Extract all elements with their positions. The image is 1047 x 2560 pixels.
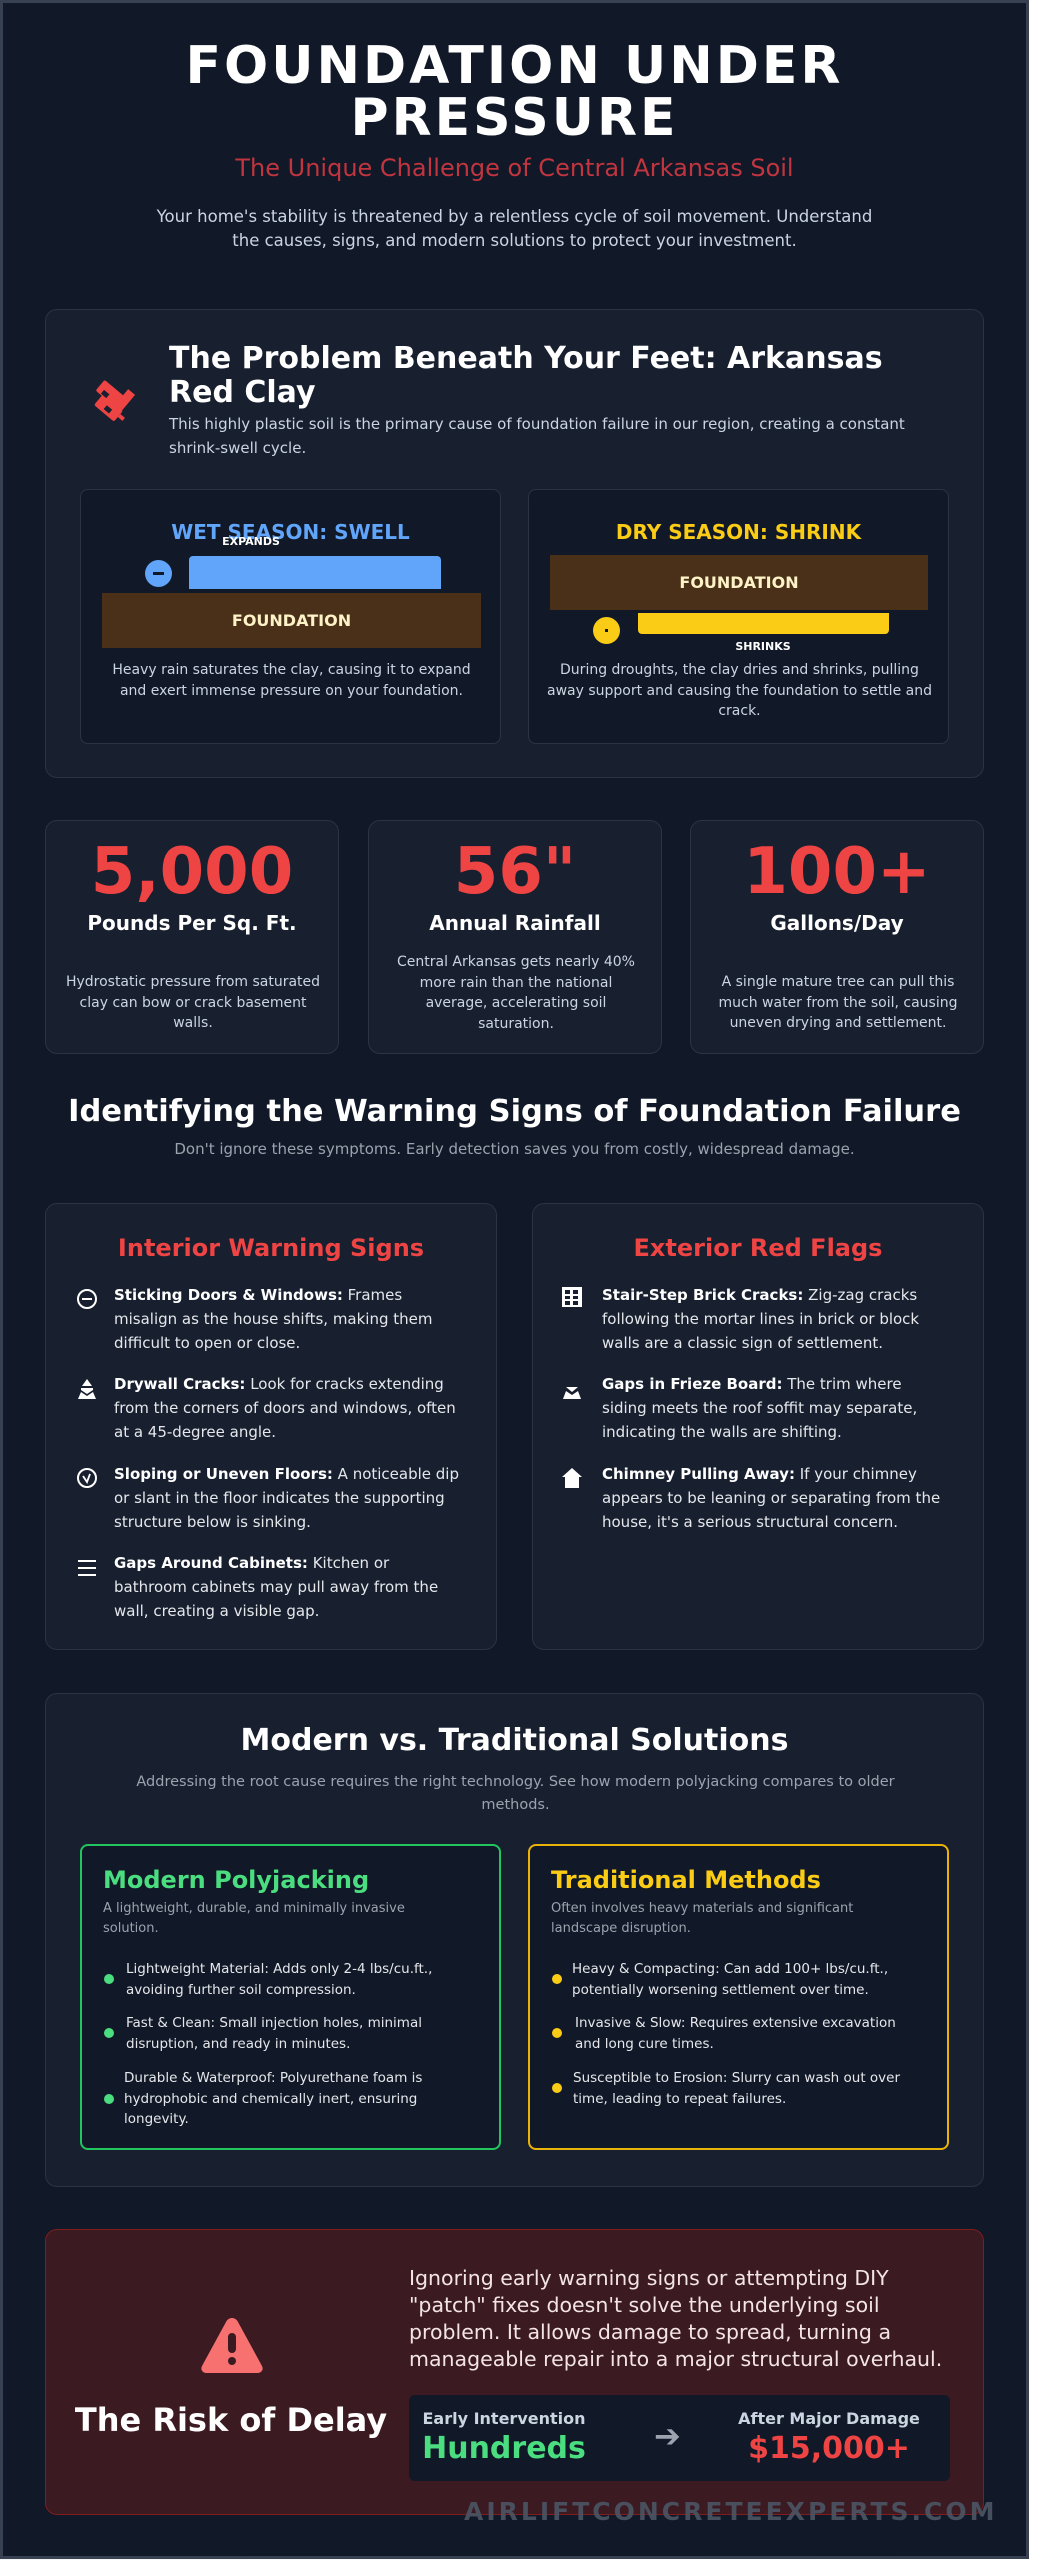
stat card: 5,000: 5,000 — [91, 835, 293, 909]
item: sloping floors: Sloping or Uneven Floors: A noticeable dip — [114, 1465, 459, 1483]
list: traditional drawbacks: and long cure times. — [575, 2036, 714, 2052]
item: chimney: house, it's a serious structural concern. — [602, 1513, 898, 1531]
panel: modern polyjacking: Modern Polyjacking — [103, 1866, 369, 1894]
panel: interior warning signs: Interior Warning Signs — [118, 1234, 424, 1262]
panel: dry season: DRY SEASON: SHRINK — [616, 520, 861, 544]
list: traditional drawbacks: Susceptible to Erosion: Slurry can wash out over — [573, 2070, 900, 2086]
item: chimney — [602, 1465, 940, 1531]
foundation block — [550, 555, 928, 610]
label: shrinks: SHRINKS — [735, 640, 791, 653]
stat card: 100+: 100+ — [743, 835, 931, 909]
title: FOUNDATION UNDER — [186, 36, 843, 96]
paragraph: manageable repair into a major structural overhaul. — [409, 2347, 942, 2371]
description — [168, 415, 905, 457]
intro text: Your home's stability is threatened by a relentless cycle of soil movement. Understand — [157, 207, 872, 226]
bar: shrinking clay — [638, 613, 889, 634]
foundation block: FOUNDATION — [232, 611, 351, 630]
item: frieze board: indicating the walls are shifting. — [602, 1423, 842, 1441]
item: sloping floors — [114, 1465, 459, 1531]
item: sloping floors: structure below is sinking. — [114, 1513, 311, 1531]
item: chimney: Chimney Pulling Away: If your chimney — [602, 1465, 917, 1483]
panel: dry season: away support and causing the foundation to settle and — [547, 682, 932, 698]
item: drywall cracks — [114, 1375, 456, 1441]
icon: warning triangle — [201, 2318, 263, 2373]
item: frieze board — [602, 1375, 917, 1441]
title: PRESSURE — [350, 88, 679, 148]
panel: wet season — [80, 489, 501, 744]
item: gaps around cabinets: bathroom cabinets may pull away from the — [114, 1578, 438, 1596]
list: traditional drawbacks: Heavy & Compacting: Can add 100+ lbs/cu.ft., — [572, 1961, 888, 1977]
item: stair-step cracks: walls are a classic sign of settlement. — [602, 1334, 883, 1352]
list: modern benefits: avoiding further soil compression. — [126, 1982, 356, 1998]
description: shrink-swell cycle. — [169, 439, 306, 457]
stat card: 56": Central Arkansas gets nearly 40% more rain than the national average, accelerating soil saturation. — [397, 954, 635, 1032]
intro text — [156, 207, 872, 250]
item: sticking doors — [114, 1286, 433, 1352]
cost comparison — [409, 2395, 950, 2481]
title — [186, 36, 843, 148]
panel: traditional methods: Traditional Methods — [551, 1866, 821, 1894]
icon: lines — [78, 1560, 96, 1576]
stat card: 56": Annual Rainfall — [429, 911, 601, 935]
intro text: the causes, signs, and modern solutions to protect your investment. — [232, 231, 797, 250]
icon: house — [562, 1468, 582, 1488]
item: sticking doors: difficult to open or close. — [114, 1334, 300, 1352]
list: modern benefits: hydrophobic and chemically inert, ensuring — [124, 2090, 417, 2106]
description: This highly plastic soil is the primary cause of foundation failure in our region, creating a constant — [169, 415, 905, 433]
item: stair-step cracks: following the mortar lines in brick or block — [602, 1310, 919, 1328]
panel: modern vs traditional: methods. — [481, 1797, 550, 1813]
bar: expanding clay — [189, 556, 441, 589]
stat card: 5,000: Pounds Per Sq. Ft. — [87, 911, 297, 935]
icon: brick grid — [562, 1287, 582, 1307]
item: drywall cracks: from the corners of doors and windows, often — [114, 1399, 456, 1417]
list: modern benefits: Durable & Waterproof: Polyurethane foam is — [124, 2070, 422, 2086]
panel: traditional methods: landscape disruption. — [551, 1921, 691, 1936]
icon: drywall — [78, 1379, 96, 1399]
list: modern benefits: longevity. — [124, 2111, 189, 2127]
icon: yellow circle — [593, 617, 620, 644]
cost comparison: Early Intervention — [422, 2409, 586, 2428]
icon: red clay — [94, 380, 135, 421]
arrow: ➔ — [654, 2417, 681, 2455]
stat card: 100+: Gallons/Day — [770, 911, 904, 935]
cost comparison: Hundreds — [422, 2431, 586, 2466]
item: gaps around cabinets: wall, creating a visible gap. — [114, 1602, 319, 1620]
panel: modern vs traditional: Modern vs. Traditional Solutions — [241, 1723, 788, 1758]
paragraph: problem. It allows damage to spread, turning a — [409, 2320, 891, 2344]
icon: blue circle — [145, 560, 172, 587]
panel: dry season — [528, 489, 949, 744]
list: traditional drawbacks: Invasive & Slow: Requires extensive excavation — [575, 2015, 896, 2031]
item: stair-step cracks — [602, 1286, 919, 1352]
panel: wet season: WET SEASON: SWELL — [171, 520, 410, 544]
stat card: 56": 56" — [454, 835, 576, 909]
list: modern benefits: Lightweight Material: Adds only 2-4 lbs/cu.ft., — [126, 1961, 432, 1977]
heading: warning signs: Identifying the Warning Signs of Foundation Failure — [68, 1094, 961, 1129]
icon: check circle — [77, 1468, 97, 1488]
list: traditional drawbacks — [552, 1961, 900, 2106]
cost comparison: After Major Damage — [738, 2409, 920, 2428]
item: sloping floors: or slant in the floor indicates the supporting — [114, 1489, 445, 1507]
subtitle: The Unique Challenge of Central Arkansas Soil — [235, 154, 794, 182]
paragraph: "patch" fixes doesn't solve the underlying soil — [409, 2293, 880, 2317]
panel: modern polyjacking — [80, 1844, 501, 2150]
heading: The Risk of Delay — [75, 2401, 387, 2439]
item: chimney: appears to be leaning or separating from the — [602, 1489, 940, 1507]
panel: problem beneath your feet — [45, 309, 984, 778]
paragraph — [409, 2266, 942, 2371]
list: modern benefits: Fast & Clean: Small injection holes, minimal — [126, 2015, 422, 2031]
panel: wet season: and exert immense pressure on your foundation. — [120, 682, 463, 698]
foundation block — [102, 593, 481, 648]
item: sticking doors: Sticking Doors & Windows: Frames — [114, 1286, 402, 1304]
watermark: AIRLIFTCONCRETEEXPERTS.COM — [464, 2497, 998, 2526]
subheading: Don't ignore these symptoms. Early detection saves you from costly, widespread damage. — [174, 1140, 855, 1158]
panel: exterior red flags: Exterior Red Flags — [634, 1234, 882, 1262]
item: frieze board: siding meets the roof soffit may separate, — [602, 1399, 917, 1417]
list: traditional drawbacks: potentially worsening settlement over time. — [572, 1982, 869, 1998]
panel: traditional methods — [528, 1844, 949, 2150]
stat card: 56" — [368, 820, 662, 1054]
stat card: 100+: A single mature tree can pull this much water from the soil, causing uneven drying and settlement. — [719, 974, 957, 1031]
panel: dry season: crack. — [718, 703, 761, 719]
heading: Red Clay — [169, 375, 316, 410]
panel: wet season: Heavy rain saturates the clay, causing it to expand — [112, 662, 471, 678]
item: frieze board: Gaps in Frieze Board: The trim where — [602, 1375, 902, 1393]
panel: risk of delay — [45, 2229, 984, 2515]
paragraph: Ignoring early warning signs or attempting DIY — [409, 2266, 889, 2290]
stat card: 5,000: Hydrostatic pressure from saturated clay can bow or crack basement walls. — [66, 974, 320, 1031]
list: modern benefits: disruption, and ready in minutes. — [126, 2036, 350, 2052]
panel: modern polyjacking: solution. — [103, 1921, 159, 1936]
cost comparison: $15,000+ — [748, 2431, 910, 2466]
panel: modern vs traditional — [45, 1693, 984, 2187]
panel: exterior red flags — [532, 1203, 984, 1650]
list: modern benefits — [104, 1961, 432, 2127]
item: drywall cracks: at a 45-degree angle. — [114, 1423, 276, 1441]
label: expands: EXPANDS — [222, 535, 280, 548]
heading: The Problem Beneath Your Feet: Arkansas — [169, 341, 883, 376]
panel: modern vs traditional: Addressing the root cause requires the right technology. See how modern polyjacking compares to older — [136, 1774, 895, 1790]
list: traditional drawbacks: time, leading to repeat failures. — [573, 2090, 786, 2106]
item: sticking doors: misalign as the house shifts, making them — [114, 1310, 433, 1328]
item: gaps around cabinets: Gaps Around Cabinets: Kitchen or — [114, 1554, 389, 1572]
item: gaps around cabinets — [114, 1554, 438, 1620]
stat card: 5,000 — [45, 820, 339, 1054]
item: drywall cracks: Drywall Cracks: Look for cracks extending — [114, 1375, 444, 1393]
heading — [169, 341, 883, 410]
panel: traditional methods: Often involves heavy materials and significant — [551, 1901, 853, 1916]
stat card: 100+ — [690, 820, 984, 1054]
item: stair-step cracks: Stair-Step Brick Cracks: Zig-zag cracks — [602, 1286, 917, 1304]
icon: frieze gap — [563, 1387, 581, 1399]
icon: minus circle — [77, 1289, 97, 1309]
panel: modern polyjacking: A lightweight, durable, and minimally invasive — [103, 1901, 405, 1916]
panel: dry season: During droughts, the clay dries and shrinks, pulling — [560, 662, 919, 678]
panel: interior warning signs — [45, 1203, 497, 1650]
foundation block: FOUNDATION — [679, 573, 799, 592]
